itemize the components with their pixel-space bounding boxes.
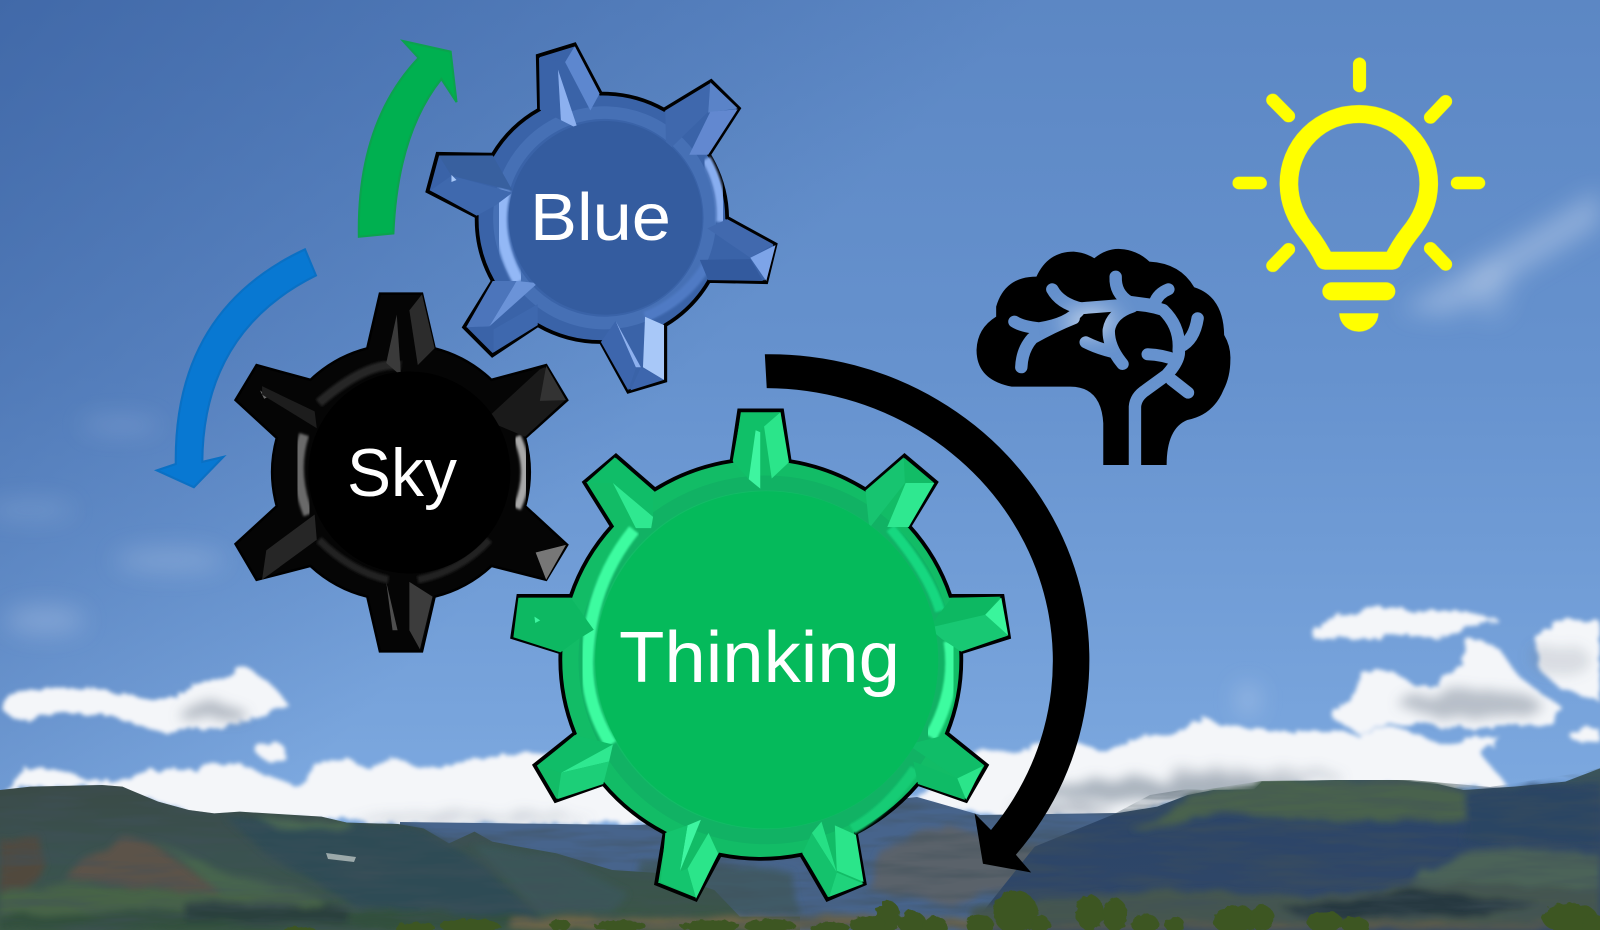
mountain terrain detail bbox=[0, 760, 1600, 930]
icon: brain bbox=[977, 249, 1230, 465]
tooth facets bbox=[430, 46, 776, 390]
white cliff patch bbox=[326, 853, 356, 862]
mountain strata texture bbox=[0, 760, 1600, 930]
foreground trees bbox=[284, 890, 1600, 930]
tooth facets bbox=[513, 412, 1008, 899]
label: Thinking: Thinking bbox=[619, 618, 900, 698]
gear: Blue bbox=[427, 44, 776, 392]
bulb bottom cap bbox=[1339, 313, 1378, 332]
clouds bbox=[0, 607, 1600, 827]
label: Sky: Sky bbox=[347, 435, 457, 511]
gear: Thinking bbox=[512, 410, 1009, 900]
arrow: green curved arrow up to Blue gear bbox=[359, 41, 457, 237]
inner disc bbox=[308, 371, 510, 573]
arrow: black curved arrow down bbox=[765, 354, 1089, 872]
bevel ring bbox=[499, 113, 721, 323]
bevel ring bbox=[586, 483, 951, 837]
arrow: blue curved arrow down to Sky gear bbox=[157, 249, 316, 487]
left mountain range bbox=[0, 785, 800, 930]
gear outline bbox=[236, 294, 567, 651]
right mountain range bbox=[968, 767, 1600, 930]
bevel highlights bbox=[299, 365, 525, 580]
icon: light bulb bbox=[1239, 64, 1479, 332]
cloud shading bbox=[176, 644, 1590, 822]
gear outline bbox=[427, 44, 776, 392]
gear: Sky bbox=[236, 294, 567, 651]
label: Blue: Blue bbox=[530, 180, 671, 255]
gear outline bbox=[512, 410, 1009, 900]
inner disc bbox=[595, 491, 938, 828]
high wispy clouds bbox=[0, 190, 1600, 716]
distant blue range and foothills bbox=[400, 797, 1120, 930]
tooth facets bbox=[260, 294, 566, 649]
bulb base bar bbox=[1332, 264, 1386, 318]
inner disc bbox=[509, 121, 702, 315]
bulb glass outline bbox=[1289, 114, 1429, 261]
light rays bbox=[1239, 64, 1479, 266]
